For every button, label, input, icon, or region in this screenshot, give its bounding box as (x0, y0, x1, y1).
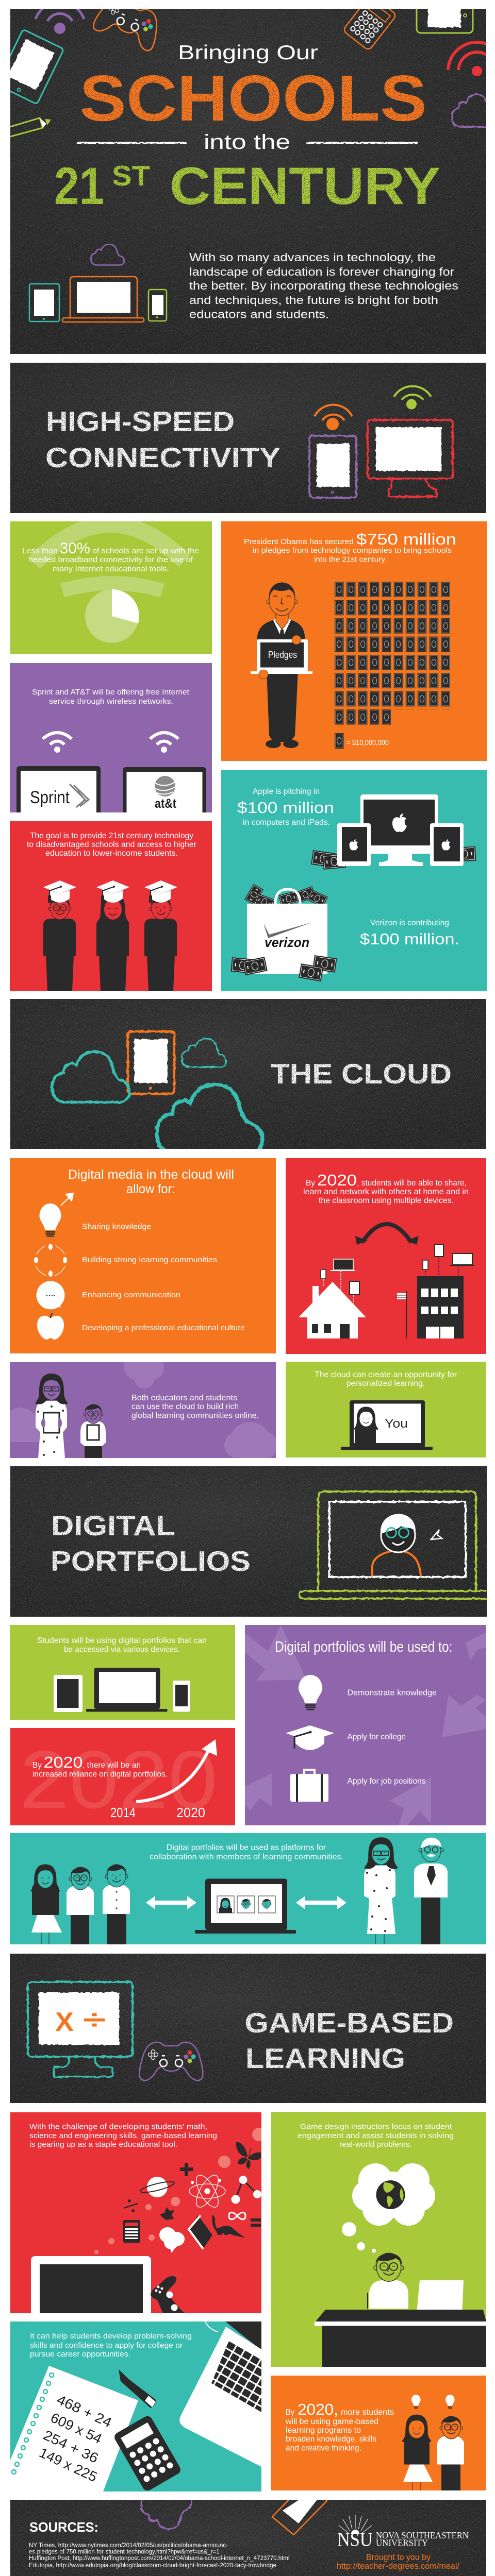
decorative clouds (4, 1350, 277, 1463)
text: increased reliance: , there will be an (82, 1761, 141, 1770)
list item: professional culture (37, 1313, 245, 1340)
text: problem-solving: skills and confidence to apply for college or (30, 2341, 183, 2350)
item: demonstrate knowledge: Demonstrate knowledge (348, 1689, 437, 1698)
illustration: desk (315, 2310, 486, 2367)
intro paragraph (189, 251, 458, 320)
text: challenge: is gearing up as a staple educational tool. (29, 2140, 177, 2149)
icon: chalk laptop (300, 1492, 487, 1599)
text: goal (27, 832, 197, 858)
panel: Apple and Verizon (221, 770, 487, 991)
text: personalized learning (315, 1370, 457, 1388)
text: game design: engagement and assist students in solving (298, 2131, 454, 2140)
panel: sources footer (10, 2483, 486, 2576)
figure: teacher with tablet (35, 1374, 68, 1458)
item: apply for job positions (290, 1770, 426, 1802)
icon: red wifi (448, 42, 486, 76)
heading: digital portfolios: PORTFOLIOS (51, 1545, 251, 1577)
text: increased reliance (32, 1753, 168, 1778)
list item: professional culture: Developing a professional educational culture (82, 1324, 245, 1332)
text: goal: The goal is to provide 21st century technology (30, 832, 193, 840)
laptop: AT&T: at&t (155, 796, 177, 811)
figure: boy with glasses (67, 1867, 94, 1944)
heading: game-based learning (244, 2007, 454, 2074)
panel: the cloud header (10, 999, 486, 1154)
heading: 21st century (56, 166, 439, 205)
icon: molecule (231, 2176, 261, 2204)
figure: girl (402, 2415, 433, 2490)
icon: calculator (123, 2220, 140, 2243)
icon: brain (159, 2227, 185, 2253)
panel: various devices (10, 1625, 235, 1720)
icon: purple cloud right (452, 94, 495, 127)
text: 30% statistic (22, 540, 199, 573)
icon: purple controller (140, 2042, 203, 2080)
text: by 2020 students: 2020 (317, 1171, 357, 1189)
text: 30% statistic: of schools are set up with the (92, 547, 199, 555)
illustration: house with devices (299, 1259, 366, 1338)
text: source list: Edutopia, http://www.edutopia.org/blog/classroom-cloud-bright-forecast-2020-tacy-trowbridge (29, 2563, 276, 2569)
icon: orange wifi (315, 405, 352, 430)
heading: 21st century: 21 (54, 157, 104, 215)
illustration: laptop You: You (385, 1417, 408, 1431)
icon group: devices and cloud (29, 244, 167, 322)
text: by 2020 students: , students will be able to share, (357, 1179, 467, 1188)
math symbols on monitor: ÷ (83, 2005, 106, 2035)
icon: calculator (112, 2414, 183, 2493)
intro paragraph: the better. By incorporating these technologies (189, 279, 458, 292)
illustration: notebook with sums: 149 x 225 (37, 2445, 100, 2485)
icon: plus (180, 2163, 193, 2176)
arrow: two-way curved (355, 1224, 419, 1245)
legend: bill = $10,000,000: = $10,000,000 (346, 738, 389, 747)
icon: equals (251, 2218, 261, 2227)
icons: teal clouds (52, 1039, 262, 1154)
icon: orange calculator (343, 9, 396, 49)
credit line (337, 2552, 459, 2571)
legend: bill = $10,000,000 (335, 733, 389, 749)
heading: high-speed connectivity (45, 405, 280, 473)
panel: personalized learning (286, 1362, 486, 1458)
money behind Apple devices (311, 846, 476, 870)
text: increased reliance: 2020 (43, 1753, 82, 1771)
heading: digital portfolios: DIGITAL (51, 1510, 175, 1541)
laptop: AT&T (123, 767, 206, 829)
icon: purple tablet (309, 436, 356, 498)
icon: red monitor (368, 420, 453, 497)
heading: 21st century: ST (112, 160, 150, 192)
arrow: two-way right (296, 1896, 346, 1909)
figure: older man with tie (414, 1838, 448, 1944)
heading: digital portfolios (51, 1510, 251, 1577)
panel: Sprint and AT&T (10, 663, 212, 829)
icon: infinity (229, 2212, 245, 2219)
illustration: laptop with portraits (195, 1878, 296, 1934)
figure: woman in dotted dress (364, 1837, 398, 1944)
item: apply for college (286, 1725, 406, 1750)
text: 30% statistic: needed broadband connectivity for the use of (28, 555, 193, 564)
illustration: Obama holding pledges: Pledges (268, 650, 297, 660)
text: collaboration: Digital portfolios will be used as platforms for (167, 1843, 326, 1852)
figure: graduate boy (144, 880, 177, 991)
icon: orange game controller (93, 9, 157, 52)
text: $750 million pledges: into the 21st century. (314, 555, 387, 564)
text: source list: es-pledges-of-750-million-for-student-technology.html?hpw&rref=us&_r=1 (29, 2549, 220, 2555)
text: Verizon $100 million: $100 million. (360, 930, 459, 948)
icon: book (189, 2215, 212, 2249)
pictogram: 75 stacks of money (335, 582, 450, 725)
text: personalized learning: The cloud can create an opportunity for (315, 1370, 457, 1379)
text: free internet (32, 688, 190, 706)
list item: sharing knowledge (39, 1193, 151, 1236)
panel: collaboration (10, 1833, 486, 1944)
illustration: notebook with sums (10, 2366, 138, 2492)
list item: enhancing communication: Enhancing communication (82, 1291, 180, 1299)
text: game design: real-world problems. (339, 2140, 412, 2149)
text: problem-solving (30, 2332, 192, 2359)
text: 30% statistic: many Internet educational tools. (53, 565, 169, 573)
panel: game design instructors (271, 2112, 486, 2367)
text: free internet: service through wireless networks. (49, 697, 173, 706)
text: source list: NY Times, http://www.nytimes.com/2014/02/05/us/politics/obama-announc- (29, 2543, 228, 2549)
illustration: notebook with sums: 609 x 54 (48, 2410, 104, 2447)
text: game design (298, 2123, 454, 2149)
panel: game-based learning header (10, 1954, 486, 2103)
logo: Nova Southeastern University: NOVA SOUTHEASTERN (376, 2530, 469, 2540)
decorative arrows (245, 1625, 486, 1825)
icon: game controller silhouette (151, 2276, 185, 2313)
heading: digital media (68, 1167, 234, 1196)
list item: learning communities (34, 1244, 217, 1277)
text: more students: By (286, 2408, 294, 2417)
icon: green wifi (394, 386, 431, 409)
panel: problem-solving (10, 2321, 261, 2493)
panel: 30% of schools (10, 521, 212, 654)
text: various devices: be accessed via various devices. (64, 1646, 180, 1654)
illustration: Apple devices (337, 794, 464, 866)
math symbols on monitor (55, 2005, 106, 2037)
text: problem-solving: pursue career opportunities. (30, 2350, 130, 2359)
text: more students: broaden knowledge, skills (286, 2435, 376, 2444)
panel: reliance by 2020 (10, 1728, 235, 1825)
credit line: Brought to you by (366, 2552, 431, 2562)
laptop: Sprint: Sprint (30, 788, 70, 807)
text: goal: education to lower-income students. (45, 849, 178, 858)
heading: high-speed connectivity: CONNECTIVITY (45, 442, 280, 473)
text: Verizon $100 million: Verizon is contributing (370, 919, 449, 927)
text: $750 million pledges: $750 million (356, 530, 456, 548)
panel: high-speed connectivity header (10, 363, 486, 513)
heading: the cloud: THE CLOUD (271, 1058, 452, 1090)
arrow: two-way left (146, 1896, 196, 1909)
figure: student at desk (368, 2253, 408, 2309)
panel: by 2020 game-based programs (271, 2376, 486, 2490)
intro paragraph: landscape of education is forever changing for (189, 265, 454, 278)
icon: purple wifi (34, 9, 86, 34)
text: by 2020 students: the classroom using multiple devices. (319, 1196, 454, 1205)
text: source list (29, 2543, 290, 2569)
icons: lightbulbs (411, 2395, 455, 2409)
icon: cursor (431, 1530, 442, 1539)
list item: sharing knowledge: Sharing knowledge (82, 1222, 151, 1231)
text: challenge: science and engineering skills, game-based learning (29, 2131, 217, 2140)
logo: Nova Southeastern University: UNIVERSITY (376, 2538, 428, 2548)
axis labels 2014 and 2020: 2020 (176, 1805, 205, 1820)
text: Apple $100 million: in computers and iPads. (243, 818, 330, 827)
text: by 2020 students (303, 1171, 469, 1205)
illustration: Verizon shopping bag: verizon (265, 935, 309, 950)
heading: game-based learning: LEARNING (245, 2042, 405, 2074)
text: various devices (37, 1636, 207, 1654)
icon: orange tablet (128, 1031, 174, 1094)
illustration: notebook with sums: 254 + 36 (41, 2427, 101, 2466)
panel: digital media in the cloud (10, 1158, 276, 1353)
heading: SCHOOLS: SCHOOLS (79, 62, 427, 134)
text: challenge: With the challenge of developing students' math, (29, 2123, 207, 2131)
text: by 2020 students: learn and network with others at home and in (303, 1188, 469, 1196)
intro paragraph: educators and students. (189, 308, 329, 320)
wifi watermark arcs (34, 524, 185, 590)
text: Apple $100 million: $100 million (237, 799, 334, 817)
math symbols on monitor: X (55, 2007, 74, 2037)
illustration: Obama holding pledges (251, 582, 312, 748)
axis labels 2014 and 2020 (110, 1805, 205, 1820)
figure: graduate girl (96, 880, 129, 991)
figure: boy (437, 2416, 464, 2490)
item: apply for job positions: Apply for job positions (348, 1777, 426, 1786)
icons: tablet laptop phone (54, 1668, 190, 1712)
text: $750 million pledges (244, 530, 456, 564)
icon: green pencil (10, 118, 51, 137)
heading: used to: Digital portfolios will be used to: (275, 1639, 453, 1655)
icon: planet (139, 2177, 175, 2197)
laptop: Sprint (16, 766, 101, 828)
illustration: laptop on desk (405, 2280, 464, 2317)
icon: orange tablet (272, 2483, 327, 2535)
text: various devices: Students will be using digital portfolios that can (37, 1636, 207, 1645)
panel: Obama pledges (221, 521, 487, 761)
icon: dinosaur (212, 2215, 245, 2238)
heading: Bringing Our: Bringing Our (178, 42, 318, 64)
watermark: 2020: 2020 (20, 1734, 218, 1825)
icon: inverted purple cloud (141, 2495, 191, 2529)
panel: digital portfolios header (10, 1466, 487, 1617)
heading: digital media: Digital media in the cloud will (68, 1167, 234, 1182)
text: personalized learning: personalized learning. (346, 1379, 425, 1388)
icon: white wifi right (150, 733, 178, 753)
text: more students: learning programs to (286, 2426, 361, 2435)
credit line: http://teacher-degrees.com/meal/ (337, 2561, 459, 2571)
text: both educators (131, 1394, 259, 1420)
text: by 2020 students: By (306, 1179, 315, 1188)
icon: pencil (119, 2369, 156, 2408)
text: Apple $100 million: Apple is pitching in (253, 787, 320, 796)
text: more students (285, 2400, 394, 2453)
text: Verizon $100 million (360, 919, 459, 948)
text: Apple $100 million (237, 787, 334, 827)
text: 30% statistic: 30% (60, 540, 90, 557)
text: increased reliance: By (32, 1761, 42, 1770)
figure: student with tablet (80, 1404, 106, 1458)
icon: white wifi left (43, 733, 72, 753)
illustration: tablet (31, 2256, 151, 2328)
figure: girl (30, 1865, 62, 1944)
icon: divide (124, 2199, 138, 2212)
thought cloud (342, 2163, 435, 2253)
logo: Nova Southeastern University (337, 2515, 469, 2551)
text: $750 million pledges: President Obama has secured (244, 537, 354, 546)
arrow: growth curve (136, 1739, 217, 1802)
text: $750 million pledges: in pledges from technology companies to bring schools (253, 546, 452, 555)
text: collaboration: collaboration with members of learning communities. (150, 1853, 343, 1861)
text: more students: and creative thinking. (286, 2444, 361, 2453)
icon: atom (189, 2172, 225, 2210)
heading: 21st century: CENTURY (170, 157, 440, 215)
text: source list: Huffington Post, http://www.huffingtonpost.com/2014/02/04/obama-school-internet_n_4723770.html (29, 2555, 290, 2562)
panel: math and science (10, 2112, 266, 2328)
intro paragraph: and techniques, the future is bright for both (189, 294, 438, 307)
text: both educators: Both educators and students (131, 1394, 237, 1402)
panel: educators and students (4, 1350, 277, 1463)
heading: digital media: allow for: (126, 1182, 175, 1196)
icon: teal tablet (10, 29, 64, 104)
icon: butterfly (236, 2142, 261, 2169)
illustration: laptop keyboard (179, 2321, 261, 2467)
text: 30% statistic: Less than (22, 547, 58, 555)
text: more students: 2020, (298, 2400, 338, 2418)
heading: high-speed connectivity: HIGH-SPEED (46, 405, 235, 437)
figure: student on screen (372, 1514, 421, 1577)
axis labels 2014 and 2020: 2014 (110, 1805, 136, 1820)
text: goal: to disadvantaged schools and access to higher (27, 840, 197, 849)
text: more students: more students (341, 2408, 394, 2417)
logo: Nova Southeastern University: NSU (337, 2529, 373, 2551)
text: free internet: Sprint and AT&T will be offering free Internet (32, 688, 190, 697)
text: increased reliance: increased reliance on digital portfolios. (32, 1770, 168, 1778)
intro paragraph: With so many advances in technology, the (189, 251, 436, 264)
text: problem-solving: It can help students develop problem-solving (30, 2332, 192, 2341)
illustration: Verizon shopping bag (231, 884, 337, 981)
illustration: school with devices (397, 1245, 474, 1338)
icon: green tablet (416, 9, 473, 34)
text: more students: will be using game-based (285, 2417, 378, 2426)
list item: learning communities: Building strong learning communities (82, 1256, 217, 1264)
icon: globe (376, 2180, 405, 2209)
pie chart: 30% (85, 589, 139, 643)
list item: enhancing communication (36, 1281, 180, 1310)
panel: goal graduates (10, 821, 212, 991)
illustration: laptop You (341, 1400, 433, 1450)
icon: star (160, 2207, 174, 2220)
text: both educators: can use the cloud to build rich (131, 1402, 239, 1411)
text: both educators: global learning communities online. (131, 1412, 259, 1420)
item: demonstrate knowledge (299, 1675, 437, 1710)
text: collaboration (150, 1843, 343, 1861)
panel: digital portfolios uses (245, 1625, 486, 1825)
item: apply for college: Apply for college (348, 1733, 406, 1741)
icon: teal monitor (28, 1982, 133, 2077)
pale bubbles (94, 2128, 266, 2254)
figure: graduate with glasses (43, 880, 76, 991)
chalk rule left (77, 142, 186, 144)
text: game design: Game design instructors focus on student (300, 2123, 452, 2131)
text: challenge (29, 2123, 217, 2149)
panel: hero chalkboard (0, 0, 495, 354)
figure: boy (103, 1865, 130, 1944)
panel: by 2020 share at home and school (286, 1158, 486, 1354)
heading: game-based learning: GAME-BASED (244, 2007, 454, 2039)
heading: sources: SOURCES: (29, 2519, 98, 2535)
heading: into the: into the (204, 131, 290, 154)
illustration: notebook with sums: 468 + 24 (54, 2392, 114, 2431)
chalk rule right (306, 142, 418, 144)
